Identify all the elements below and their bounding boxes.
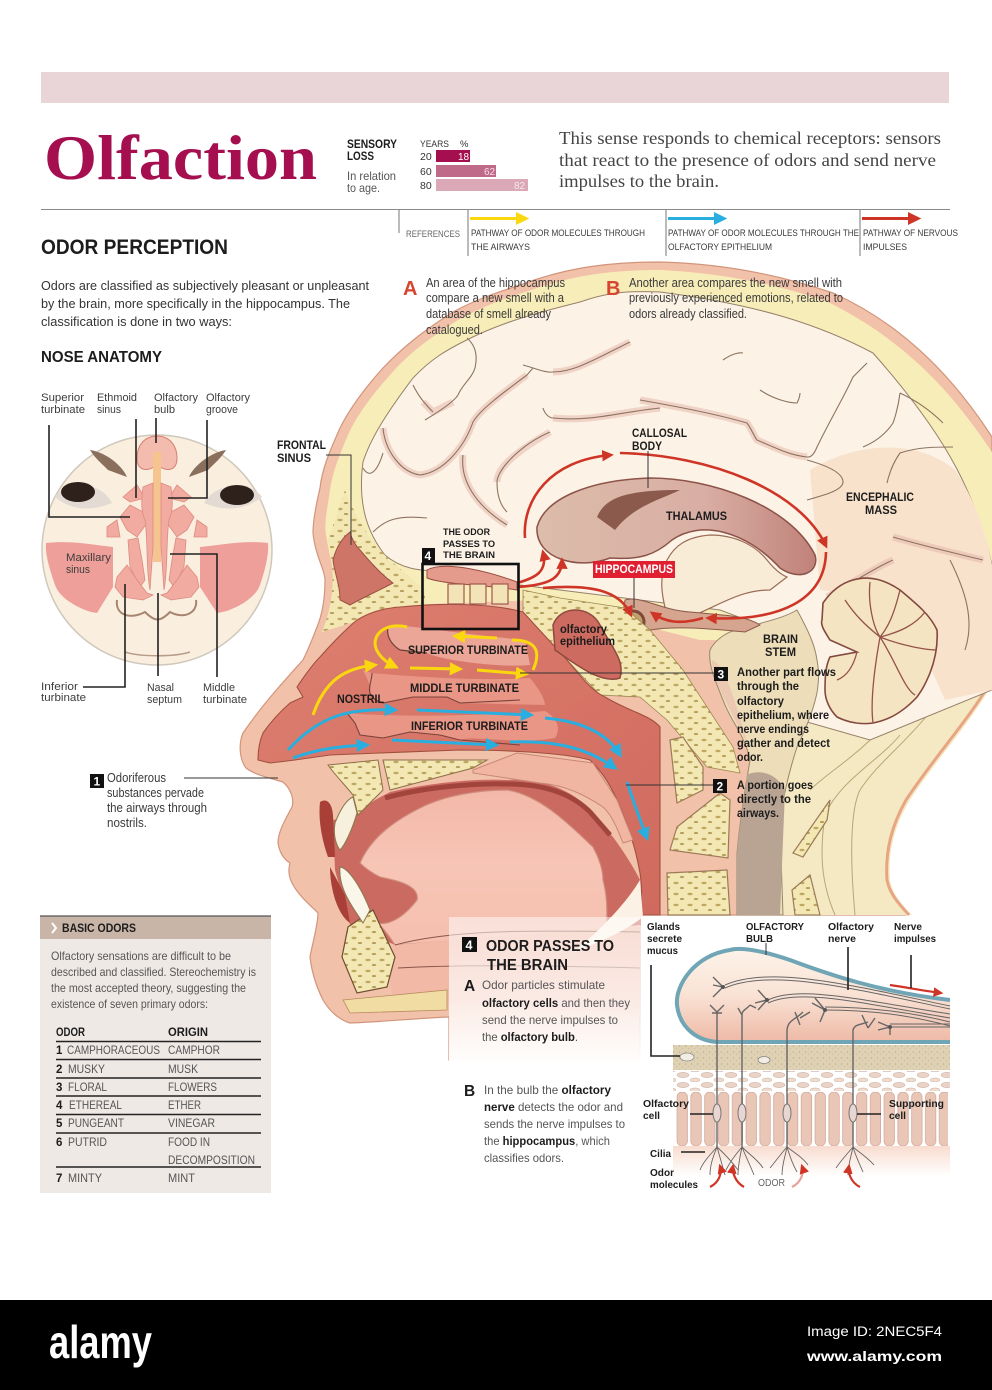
step 2 note xyxy=(713,778,813,820)
way A: compare a new smell with a xyxy=(426,291,564,305)
nasal cavity and pharynx xyxy=(258,604,660,915)
upper jaw bones xyxy=(328,760,383,815)
nose anatomy labels: Middle xyxy=(203,682,235,694)
bulb fill xyxy=(677,949,950,1042)
nose anatomy labels: groove xyxy=(206,404,238,416)
odors table: PUNGEANT xyxy=(68,1116,125,1130)
nose anatomy labels: Olfactory xyxy=(154,392,198,404)
nose anatomy labels: sinus xyxy=(97,404,121,416)
diagram labels: Nerve xyxy=(894,921,922,933)
step 3 note: odor. xyxy=(737,750,763,764)
head anatomy labels: BRAIN xyxy=(763,634,798,646)
paragraph: classification: by the brain, more specifically in the hippocampus. The xyxy=(41,296,350,311)
way A xyxy=(403,276,565,337)
diagram labels: cell xyxy=(643,1110,660,1122)
arrows: airway yellow xyxy=(313,626,537,715)
panel: odor passes to the brain text: the hippocampus, which xyxy=(484,1134,610,1148)
vertebrae xyxy=(667,737,830,915)
step 3 note: gather and detect xyxy=(737,736,830,750)
nose anatomy labels: Superior xyxy=(41,392,84,404)
gyri shadows xyxy=(383,342,983,597)
step 1 note: nostrils. xyxy=(107,816,147,830)
panel: odor passes to the brain text xyxy=(449,917,641,1165)
panel: basic odors: BASIC ODORS xyxy=(62,923,136,935)
box: odor passes to the brain marker: THE ODOR xyxy=(443,527,490,538)
leader lines xyxy=(651,947,911,1152)
odors table: 6 xyxy=(56,1137,62,1149)
turbinates right xyxy=(161,483,207,600)
eyes and brows xyxy=(55,450,262,509)
head anatomy labels: NOSTRIL xyxy=(337,694,384,706)
panel: odor passes to the brain text: olfactory cells and then they xyxy=(482,996,630,1010)
references legend: PATHWAY OF NERVOUS xyxy=(863,228,958,239)
soft palate xyxy=(473,753,633,843)
lower jaw and teeth xyxy=(342,910,395,993)
cerebellum xyxy=(822,578,937,724)
odors table: ETHER xyxy=(168,1098,201,1112)
odors table: CAMPHORACEOUS xyxy=(67,1043,160,1057)
step 3 note: nerve endings xyxy=(737,722,809,736)
nose anatomy labels: Maxillary xyxy=(66,552,112,564)
diagram labels: Olfactory xyxy=(828,921,874,933)
arrows: nerve impulses red xyxy=(517,453,826,622)
step 2 note: airways. xyxy=(737,806,779,820)
skull xyxy=(322,270,992,640)
references legend: REFERENCES xyxy=(406,229,460,240)
step 3 note: epithelium, where xyxy=(737,708,829,722)
diagram labels: cell xyxy=(889,1110,906,1122)
sensory loss chart: % xyxy=(460,139,469,150)
intro text: impulses to the brain. xyxy=(559,171,719,191)
odors table: MINT xyxy=(168,1171,196,1185)
odors table: DECOMPOSITION xyxy=(168,1153,255,1167)
mouth cavity xyxy=(333,780,643,945)
panel: odor passes to the brain text: send the nerve impulses to xyxy=(482,1013,618,1027)
step 3 note: Another part flows xyxy=(737,665,836,679)
panel: odor passes to the brain text: classifies odors. xyxy=(484,1151,564,1165)
head anatomy labels: STEM xyxy=(765,647,796,659)
way B: B xyxy=(606,278,620,300)
way A: catalogued. xyxy=(426,323,483,337)
head anatomy labels: BODY xyxy=(632,441,662,453)
illustration: head cross section xyxy=(240,262,992,1060)
nose anatomy labels: Nasal xyxy=(147,682,174,694)
odors table: VINEGAR xyxy=(168,1116,215,1130)
heading: nose anatomy: NOSE ANATOMY xyxy=(41,349,163,366)
way A: An area of the hippocampus xyxy=(426,276,565,290)
way B: Another area compares the new smell with xyxy=(629,276,842,290)
tongue xyxy=(360,790,607,945)
diagram labels: secrete xyxy=(647,933,682,945)
footer: stock image bar: alamy xyxy=(49,1316,152,1368)
way A: A xyxy=(403,278,417,300)
bulb outline xyxy=(677,949,950,1042)
panel: odor passes to the brain text: nerve detects the odor and xyxy=(484,1100,623,1114)
nose anatomy labels: turbinate xyxy=(41,692,86,704)
panel: odor passes to the brain text: THE BRAIN xyxy=(487,957,568,974)
step 1 note: substances pervade xyxy=(107,786,204,800)
diagram labels: Cilia xyxy=(650,1148,671,1160)
step 3 note: olfactory xyxy=(737,694,784,708)
diagram labels: Glands xyxy=(647,921,680,933)
sphenoid sinus xyxy=(553,610,621,679)
nose anatomy labels: turbinate xyxy=(41,404,85,416)
skin xyxy=(240,262,992,1060)
step 3 note xyxy=(714,665,836,764)
diagram labels: BULB xyxy=(746,933,773,945)
odors table: 2 xyxy=(56,1064,62,1076)
panel: basic odors: the most accepted theory, suggesting the xyxy=(51,981,246,995)
nose shape xyxy=(117,600,196,620)
sensory loss chart: LOSS xyxy=(347,151,374,163)
head anatomy labels: SUPERIOR TURBINATE xyxy=(408,645,528,657)
paragraph: classification: classification is done in two ways: xyxy=(41,314,232,329)
nose anatomy labels: Ethmoid xyxy=(97,392,137,404)
thalamus crescent xyxy=(537,478,816,575)
box: odor passes to the brain marker: THE BRAIN xyxy=(443,550,495,561)
intro text xyxy=(559,128,941,191)
header band xyxy=(41,72,949,103)
odors table: 1 xyxy=(56,1045,63,1057)
olfactory bulb xyxy=(427,566,517,590)
tissue layers xyxy=(673,1045,950,1070)
brain xyxy=(361,292,992,740)
panel: odor passes to the brain text: sends the nerve impulses to xyxy=(484,1117,625,1131)
sensory loss chart: 82 xyxy=(514,181,526,192)
arrows: epithelium blue xyxy=(288,710,647,838)
panel: odor passes to the brain text: the olfactory bulb. xyxy=(482,1030,578,1044)
odors table: MUSK xyxy=(168,1062,198,1076)
diagram labels: molecules xyxy=(650,1179,698,1191)
diagram labels: Supporting xyxy=(889,1098,944,1110)
heading: odor perception: ODOR PERCEPTION xyxy=(41,236,228,259)
step 3 note: 3 xyxy=(718,668,724,682)
chart: olfactory bulb diagram xyxy=(641,917,953,1197)
nose anatomy labels: sinus xyxy=(66,564,90,576)
box: odor passes to the brain marker: PASSES TO xyxy=(443,539,495,550)
odors table: ORIGIN xyxy=(168,1027,208,1039)
references legend xyxy=(399,210,958,256)
diagram labels: mucus xyxy=(647,945,678,957)
nose anatomy labels: turbinate xyxy=(203,694,247,706)
nerve fibres xyxy=(725,977,950,1027)
panel: odor passes to the brain text: ODOR PASSES TO xyxy=(486,938,614,955)
panel: odor passes to the brain text: 4 xyxy=(466,938,472,952)
sensory loss chart: 62 xyxy=(484,167,496,178)
odors table: 3 xyxy=(56,1082,62,1094)
diencephalon xyxy=(662,535,787,617)
odors table: FOOD IN xyxy=(168,1135,210,1149)
sensory loss chart: 20 xyxy=(420,151,432,163)
step 3 note: through the xyxy=(737,679,799,693)
sensory loss chart xyxy=(347,139,528,195)
odor molecule arrows xyxy=(710,1166,860,1187)
odors table: 4 xyxy=(56,1100,63,1112)
references legend: IMPULSES xyxy=(863,242,907,253)
head anatomy labels: SINUS xyxy=(277,453,311,465)
head anatomy labels: MASS xyxy=(865,505,897,517)
hyoid xyxy=(573,880,643,953)
neurons xyxy=(710,977,890,1147)
head anatomy labels xyxy=(184,428,914,785)
step 2 note: 2 xyxy=(716,780,724,794)
head anatomy labels: ENCEPHALIC xyxy=(846,492,914,504)
odors table: PUTRID xyxy=(68,1135,107,1149)
diagram labels: Olfactory xyxy=(643,1098,689,1110)
step 1 note: Odoriferous xyxy=(107,771,166,785)
sensory loss chart: YEARS xyxy=(420,139,449,150)
head anatomy labels: MIDDLE TURBINATE xyxy=(410,683,519,695)
intro text: that react to the presence of odors and send nerve xyxy=(559,150,936,170)
turbinates left xyxy=(107,483,153,600)
lips channel xyxy=(319,801,350,923)
panel: odor passes to the brain text: B xyxy=(464,1083,475,1100)
panel: basic odors: existence of seven primary odors: xyxy=(51,997,208,1011)
brain stem xyxy=(710,610,819,915)
way B: previously experienced emotions, related to xyxy=(629,291,843,305)
maxillary sinuses xyxy=(46,542,268,613)
sensory loss chart: 80 xyxy=(420,180,432,192)
frontal bone xyxy=(322,490,425,632)
head anatomy labels: INFERIOR TURBINATE xyxy=(411,721,528,733)
hippocampus label xyxy=(593,561,675,578)
frontal sinus xyxy=(333,532,393,605)
references legend: THE AIRWAYS xyxy=(471,242,530,253)
panel: odor passes to the brain text: A xyxy=(464,978,475,995)
paragraph: classification xyxy=(41,278,369,329)
panel: basic odors xyxy=(40,916,271,1193)
footer: stock image bar: www.alamy.com xyxy=(806,1348,942,1364)
head anatomy labels: epithelium xyxy=(560,636,615,648)
odors table: FLORAL xyxy=(68,1080,107,1094)
sensory loss chart: In relation xyxy=(347,169,396,183)
cilia xyxy=(700,1147,874,1175)
head anatomy labels: CALLOSAL xyxy=(632,428,687,440)
paragraph: classification: Odors are classified as subjectively pleasant or unpleasant xyxy=(41,278,369,293)
sensory loss chart: to age. xyxy=(347,181,380,195)
references legend: OLFACTORY EPITHELIUM xyxy=(668,242,772,253)
panel: nose anatomy circle xyxy=(42,435,272,665)
diagram labels: OLFACTORY xyxy=(746,921,804,933)
sensory loss chart: 60 xyxy=(420,166,432,178)
odors table xyxy=(56,1027,261,1185)
nose anatomy labels xyxy=(41,392,250,706)
odors table: 7 xyxy=(56,1173,62,1185)
way B xyxy=(606,276,843,321)
way B: odors already classified. xyxy=(629,307,747,321)
box: odor passes to the brain marker: 4 xyxy=(424,549,432,563)
head anatomy labels: FRONTAL xyxy=(277,440,326,452)
panel: odor passes to the brain text: Odor particles stimulate xyxy=(482,978,605,992)
neck xyxy=(780,640,992,915)
intro text: This sense responds to chemical receptors: sensors xyxy=(559,128,941,148)
box: odor passes to the brain marker xyxy=(422,527,518,629)
diagram labels: Odor xyxy=(650,1167,674,1179)
odors table: CAMPHOR xyxy=(168,1043,220,1057)
diagram labels: ODOR xyxy=(758,1177,785,1189)
lower cerebrum shading xyxy=(810,448,992,700)
sensory loss chart: SENSORY xyxy=(347,139,397,151)
odors table: MINTY xyxy=(68,1171,102,1185)
head anatomy labels: THALAMUS xyxy=(666,511,727,523)
diagram labels: nerve xyxy=(828,933,856,945)
olfactory bulb and septum xyxy=(137,436,177,469)
panel: basic odors: described and classified. Stereochemistry is xyxy=(51,965,256,979)
odors table: ETHEREAL xyxy=(69,1098,122,1112)
diagram labels xyxy=(643,921,944,1191)
head anatomy labels: olfactory xyxy=(560,624,608,636)
nose anatomy labels: septum xyxy=(147,694,182,706)
panel: basic odors: Olfactory sensations are difficult to be xyxy=(51,949,231,963)
turbinates xyxy=(388,626,530,666)
odors table: MUSKY xyxy=(68,1062,105,1076)
step 1 note: 1 xyxy=(94,774,100,788)
impulse arrow xyxy=(890,985,941,993)
glands xyxy=(680,1053,770,1064)
references legend: PATHWAY OF ODOR MOLECULES THROUGH THE xyxy=(668,228,859,239)
way A: database of smell already xyxy=(426,307,552,321)
references legend: PATHWAY OF ODOR MOLECULES THROUGH xyxy=(471,228,645,239)
diagram labels: impulses xyxy=(894,933,936,945)
footer: stock image bar: Image ID: 2NEC5F4 xyxy=(807,1324,943,1339)
mouth floor xyxy=(390,925,640,1015)
nose anatomy labels: Olfactory xyxy=(206,392,250,404)
nose anatomy labels: Inferior xyxy=(41,681,78,693)
hippocampus label: HIPPOCAMPUS xyxy=(595,564,673,576)
skull base bone xyxy=(523,590,740,773)
gyri lines xyxy=(363,338,983,650)
odors table: 5 xyxy=(56,1118,63,1130)
midbrain band xyxy=(622,599,760,635)
odors table: FLOWERS xyxy=(168,1080,217,1094)
step 1 note xyxy=(90,771,207,830)
footer: stock image bar xyxy=(0,1300,992,1390)
step 2 note: directly to the xyxy=(737,792,811,806)
nose anatomy labels: bulb xyxy=(154,404,175,416)
sensory loss chart: 18 xyxy=(458,152,470,163)
panel: odor passes to the brain text: In the bulb the olfactory xyxy=(484,1083,611,1097)
step 2 note: A portion goes xyxy=(737,778,813,792)
title: Olfaction xyxy=(44,122,317,193)
step 1 note: the airways through xyxy=(107,801,207,815)
odors table: ODOR xyxy=(56,1027,86,1039)
